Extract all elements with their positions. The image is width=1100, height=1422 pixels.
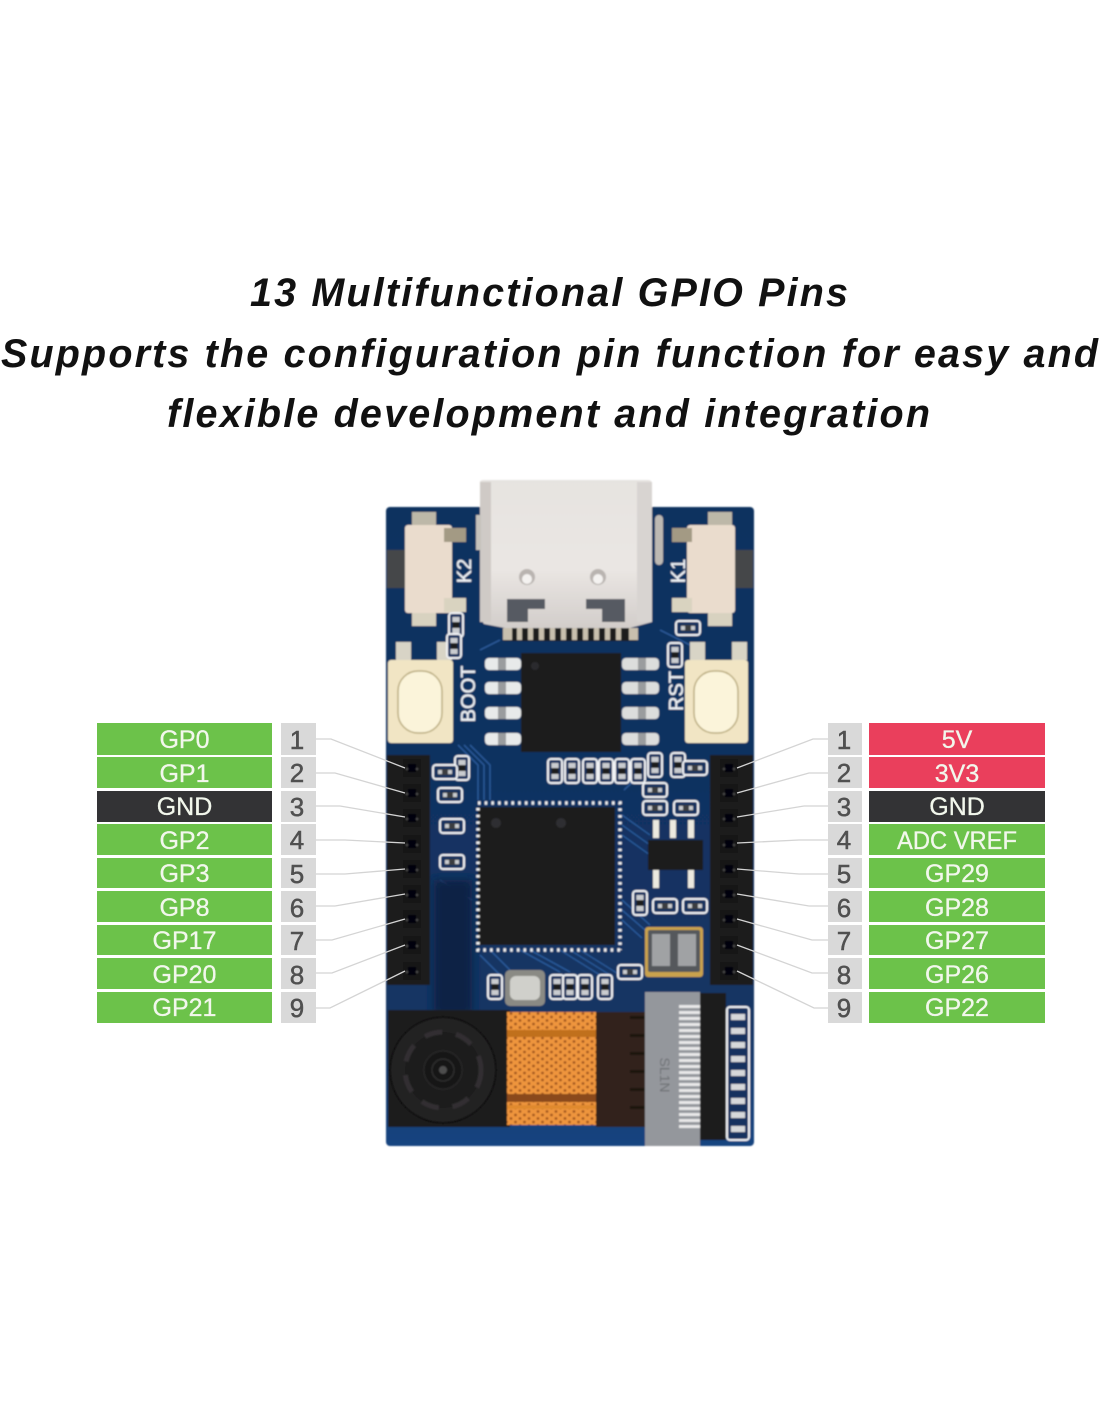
boot button [388, 642, 453, 743]
pin label ADC VREF [869, 824, 1045, 855]
orange flex cable [507, 1012, 596, 1125]
pin label GP1 [97, 757, 272, 788]
reset button [685, 642, 748, 743]
pin label GP8: GP8 [159, 894, 210, 922]
pin label GP29: GP29 [925, 860, 989, 888]
pin label GP20 [97, 958, 272, 989]
large crystal [645, 927, 703, 977]
title: 13 Multifunctional GPIO Pins [250, 271, 848, 315]
pin label 5V [869, 723, 1045, 755]
right pin numbers: 9 [837, 993, 851, 1023]
title: flexible development and integration [167, 392, 930, 436]
dark flex cable [596, 1012, 646, 1127]
pin label GP2: GP2 [159, 827, 210, 855]
pin label GP28: GP28 [925, 894, 989, 922]
pin label GP8 [97, 891, 272, 922]
pin label 3V3: 3V3 [935, 760, 979, 788]
pin label GP1: GP1 [159, 760, 210, 788]
usb-c connector [480, 480, 652, 641]
left pin numbers: 9 [290, 993, 304, 1023]
left pin numbers: 3 [290, 792, 304, 822]
flash chip [485, 653, 659, 752]
right pin labels [869, 723, 1045, 1023]
right pin numbers: 4 [837, 825, 851, 855]
left pin numbers: 2 [290, 758, 304, 788]
left pin numbers [281, 723, 316, 1023]
title [1, 271, 1099, 436]
pin label 3V3 [869, 757, 1045, 788]
pin label GND [869, 791, 1045, 822]
left pin numbers: 5 [290, 859, 304, 889]
silkscreen labels: BOOT [458, 666, 480, 722]
left pin labels [97, 723, 272, 1023]
right pin numbers: 6 [837, 893, 851, 923]
pin label GP22: GP22 [925, 994, 989, 1022]
small passive components [433, 613, 707, 999]
pin label GP21: GP21 [153, 994, 216, 1022]
right pin header [710, 755, 753, 985]
regulator chip [648, 820, 703, 888]
right pin numbers: 8 [837, 960, 851, 990]
pin label GP22 [869, 992, 1045, 1023]
left pin numbers: 1 [290, 725, 304, 755]
left pin numbers: 6 [290, 893, 304, 923]
right leader lines [737, 739, 828, 1008]
pin label GP0: GP0 [159, 726, 210, 754]
title: Supports the configuration pin function for easy and [1, 332, 1099, 376]
silkscreen labels: RST [666, 671, 688, 711]
left pin numbers: 4 [290, 825, 304, 855]
pin label GP0 [97, 723, 272, 755]
right pin numbers: 7 [837, 926, 851, 956]
right pin numbers: 5 [837, 859, 851, 889]
blurred strip [434, 880, 472, 1015]
main microcontroller [478, 803, 620, 950]
left pin numbers: 8 [290, 960, 304, 990]
pin label GP29 [869, 858, 1045, 888]
pin label GP2 [97, 824, 272, 855]
pcb base [386, 507, 754, 1146]
silkscreen labels: K2 [454, 559, 476, 583]
left pin numbers: 7 [290, 926, 304, 956]
ffc connector [645, 992, 749, 1146]
pin label GP27 [869, 925, 1045, 955]
pin label 5V: 5V [942, 726, 973, 754]
right pin numbers: 3 [837, 792, 851, 822]
pin label GND: GND [157, 793, 212, 821]
pin label GP3: GP3 [159, 860, 210, 888]
small crystal [505, 970, 545, 1006]
pin label GP20: GP20 [153, 961, 216, 989]
right pin numbers: 1 [837, 725, 851, 755]
pin label GP21 [97, 992, 272, 1023]
pin label GP26 [869, 958, 1045, 989]
right pin numbers [828, 723, 862, 1023]
silkscreen labels: K1 [668, 559, 690, 583]
camera module [388, 1010, 510, 1127]
pin label ADC VREF: ADC VREF [897, 827, 1017, 855]
side connector K2 [387, 512, 481, 626]
ffc connector: SL1N [657, 1057, 673, 1093]
pin label GP17 [97, 925, 272, 955]
pin label GND [97, 791, 272, 822]
pin label GP27: GP27 [925, 927, 989, 955]
right pin numbers: 2 [837, 758, 851, 788]
pin label GP17: GP17 [153, 927, 216, 955]
pin label GND: GND [929, 793, 985, 821]
circuit board photo illustration [386, 480, 754, 1146]
pin label GP3 [97, 858, 272, 888]
pin label GP26: GP26 [925, 961, 989, 989]
side connector K1 [655, 512, 753, 626]
left leader lines [316, 739, 405, 1008]
pin label GP28 [869, 891, 1045, 922]
left pin header [387, 755, 430, 985]
traces [440, 630, 700, 975]
silkscreen labels [454, 559, 690, 722]
